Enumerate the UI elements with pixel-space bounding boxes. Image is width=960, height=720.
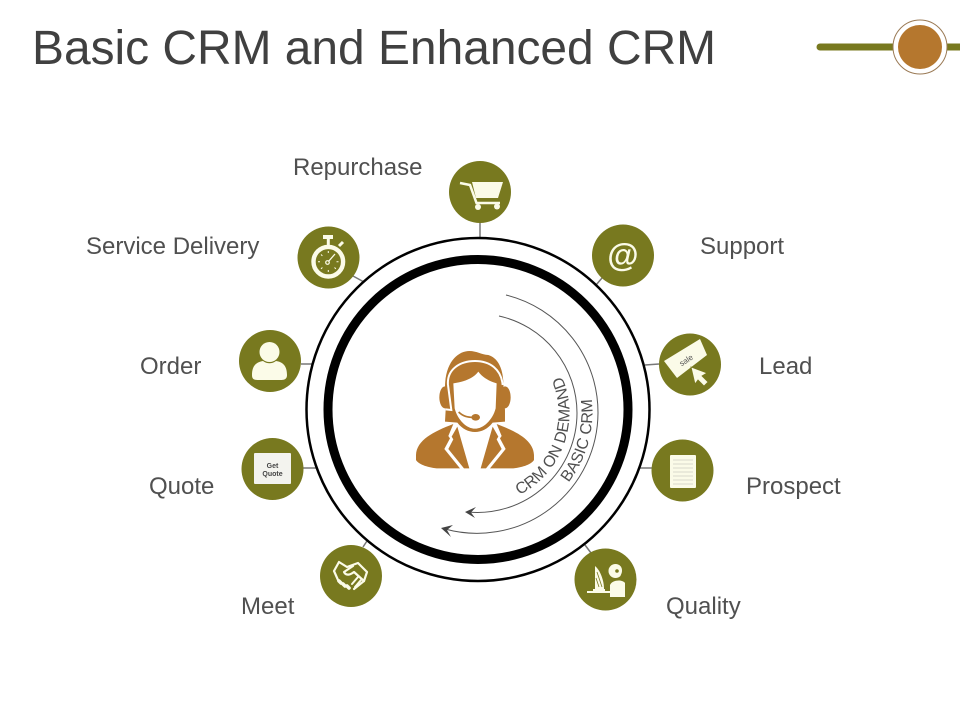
circle <box>574 548 636 610</box>
circle <box>239 330 301 392</box>
icon: get quote card <box>254 453 291 484</box>
label: Quote: Quote <box>149 473 214 500</box>
circle <box>652 440 714 502</box>
circle <box>298 226 360 288</box>
label: Prospect: Prospect <box>746 473 841 500</box>
icon: customer service agent <box>416 351 534 468</box>
icon: get quote card: Get <box>267 463 279 470</box>
circle <box>449 161 511 223</box>
header ornament <box>820 20 960 74</box>
node: Order <box>239 330 301 392</box>
arc label: basic CRM: BASIC CRM <box>560 400 593 482</box>
node: Lead <box>659 334 721 396</box>
icon: at sign: @ <box>607 237 639 273</box>
circle <box>242 438 304 500</box>
label: Support: Support <box>700 233 784 260</box>
connector lines <box>301 222 659 553</box>
node: Quality <box>574 548 636 610</box>
circle <box>592 224 654 286</box>
icon: handshake <box>334 562 367 589</box>
label: Service Delivery: Service Delivery <box>86 233 259 260</box>
label: Meet: Meet <box>241 593 295 620</box>
node: Prospect <box>652 440 714 502</box>
icon: person at computer <box>587 563 625 597</box>
icon: user <box>252 342 287 380</box>
arc arrow: CRM on demand <box>465 316 577 518</box>
icon: get quote card: Quote <box>262 471 283 478</box>
node: Meet <box>320 545 382 607</box>
icon: shopping cart <box>460 182 503 210</box>
node: Support <box>592 224 654 286</box>
label: Lead: Lead <box>759 353 812 380</box>
title: Basic CRM and Enhanced CRM <box>32 22 716 75</box>
icon: sale tag and cursor: sale <box>678 352 695 368</box>
arc arrow: basic CRM <box>441 295 598 537</box>
circle <box>320 545 382 607</box>
inner thick ring <box>328 260 628 560</box>
icon: notebook <box>670 455 696 488</box>
outer ring <box>306 238 650 581</box>
node: Quote <box>242 438 304 500</box>
node: Service Delivery <box>298 226 360 288</box>
circle <box>659 334 721 396</box>
arc label: CRM on demand: CRM ON DEMAND <box>516 378 570 493</box>
icon: stopwatch <box>314 235 343 276</box>
label: Quality: Quality <box>666 593 741 620</box>
node: Repurchase <box>449 161 511 223</box>
label: Order: Order <box>140 353 201 380</box>
label: Repurchase: Repurchase <box>293 154 422 181</box>
